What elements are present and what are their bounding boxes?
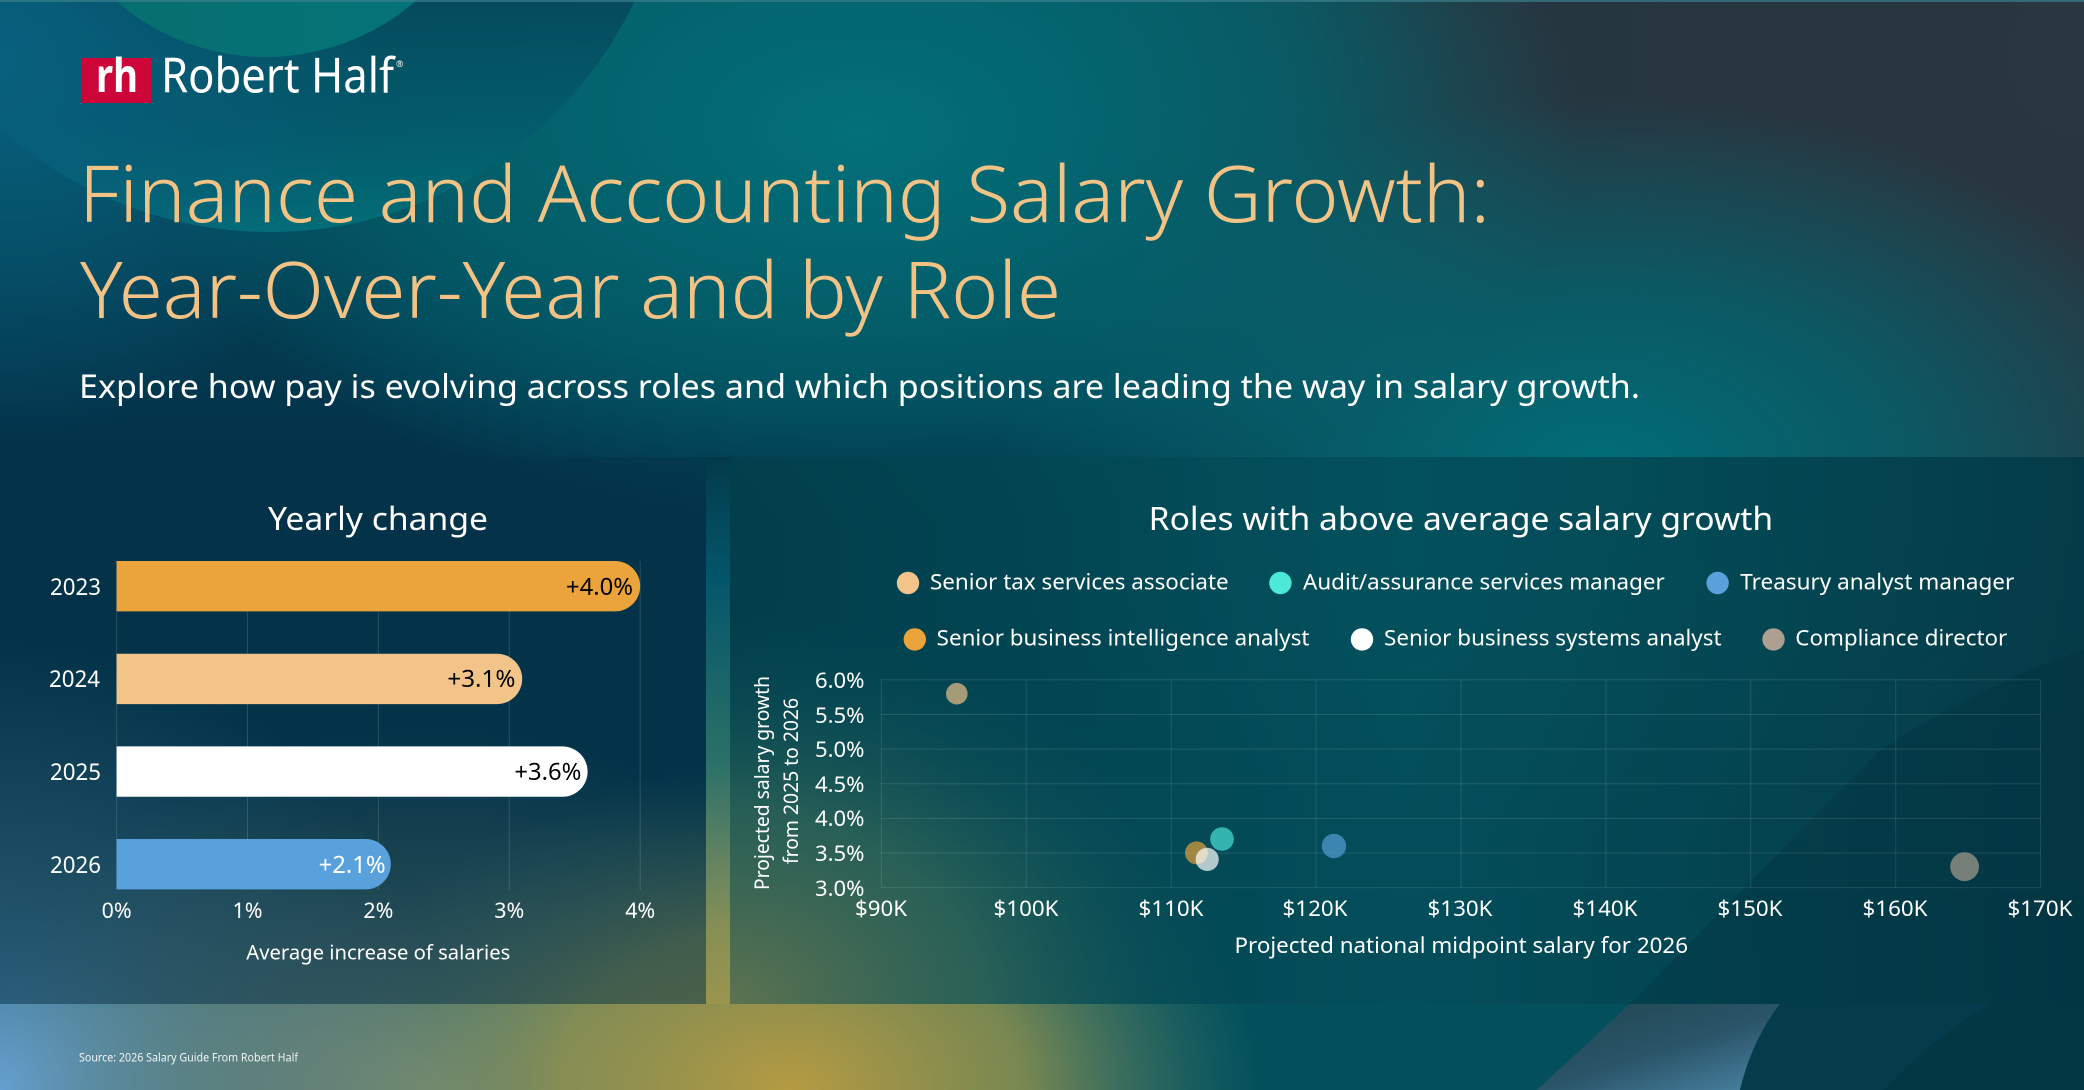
bar: 2024: +3.1% (447, 662, 515, 695)
bar: 2024 (49, 654, 522, 704)
bar: 2023: +4.0% (566, 570, 633, 603)
legend: Senior business intelligence analyst (937, 622, 1310, 652)
y axis labels: 3.0% (815, 873, 864, 903)
y axis labels: 6.0% (815, 665, 864, 695)
x axis labels: $170K (2008, 893, 2073, 923)
x axis labels: 2% (363, 895, 393, 925)
x axis labels (102, 895, 655, 925)
y axis title: from 2025 to 2026 (777, 698, 804, 864)
y axis title (748, 676, 804, 890)
x axis labels: $120K (1282, 893, 1348, 923)
x axis title: Projected national midpoint salary for 2026 (1234, 930, 1688, 960)
bar: 2025 (50, 746, 588, 797)
legend: Compliance director (1795, 622, 2007, 652)
bar: 2023: 2023 (50, 571, 101, 602)
legend (897, 566, 2014, 652)
y axis labels: 5.0% (815, 734, 864, 764)
x axis title: Average increase of salaries (246, 938, 510, 966)
y axis labels: 4.0% (815, 803, 864, 833)
heading: yearly change: Yearly change (268, 497, 488, 540)
title (79, 139, 1490, 341)
legend: Audit/assurance services manager (1303, 566, 1665, 596)
x axis labels: $90K (855, 893, 907, 923)
bar: 2025: 2025 (50, 756, 101, 787)
panel: yearly change (0, 457, 706, 1004)
x axis labels: 4% (625, 895, 655, 925)
y axis title: Projected salary growth (748, 676, 775, 890)
legend: Senior tax services associate (930, 566, 1229, 596)
x axis labels: 1% (232, 895, 262, 925)
legend: Treasury analyst manager (1740, 566, 2014, 596)
legend: Senior business systems analyst (1384, 622, 1722, 652)
bar: 2023 (50, 561, 640, 611)
bar: 2025: +3.6% (514, 755, 581, 788)
logo: Robert Half: ® (396, 57, 404, 70)
title: Year-Over-Year and by Role (80, 235, 1061, 341)
logo: Robert Half: rh (96, 42, 138, 106)
heading: roles: Roles with above average salary growth (1149, 497, 1773, 540)
x axis labels: $110K (1138, 893, 1204, 923)
y axis labels (815, 665, 864, 903)
x axis labels: $130K (1428, 893, 1493, 923)
subtitle: Explore how pay is evolving across roles and which positions are leading the way in salary growth. (79, 363, 1640, 408)
x axis labels: $160K (1862, 893, 1928, 923)
bar: 2024: 2024 (49, 663, 100, 694)
bar: 2026 (50, 839, 391, 889)
y axis labels: 5.5% (815, 700, 864, 730)
x axis labels: 3% (494, 895, 524, 925)
x axis labels: $150K (1718, 893, 1783, 923)
bar chart: average increase by year (49, 561, 655, 966)
panel: roles with above average salary growth (730, 457, 2084, 1004)
title: Finance and Accounting Salary Growth: (79, 139, 1490, 245)
x axis labels (855, 893, 2073, 923)
x axis labels: 0% (102, 895, 132, 925)
scatter chart (748, 665, 2073, 960)
x axis labels: $100K (994, 893, 1059, 923)
bar: 2026: +2.1% (319, 848, 386, 881)
y axis labels: 4.5% (815, 769, 864, 799)
logo: Robert Half: Robert Half (161, 42, 396, 108)
bar: 2026: 2026 (50, 849, 101, 880)
x axis labels: $140K (1572, 893, 1638, 923)
y axis labels: 3.5% (815, 838, 864, 868)
data points (946, 683, 1979, 881)
source note: Source: 2026 Salary Guide From Robert Half (79, 1050, 299, 1066)
